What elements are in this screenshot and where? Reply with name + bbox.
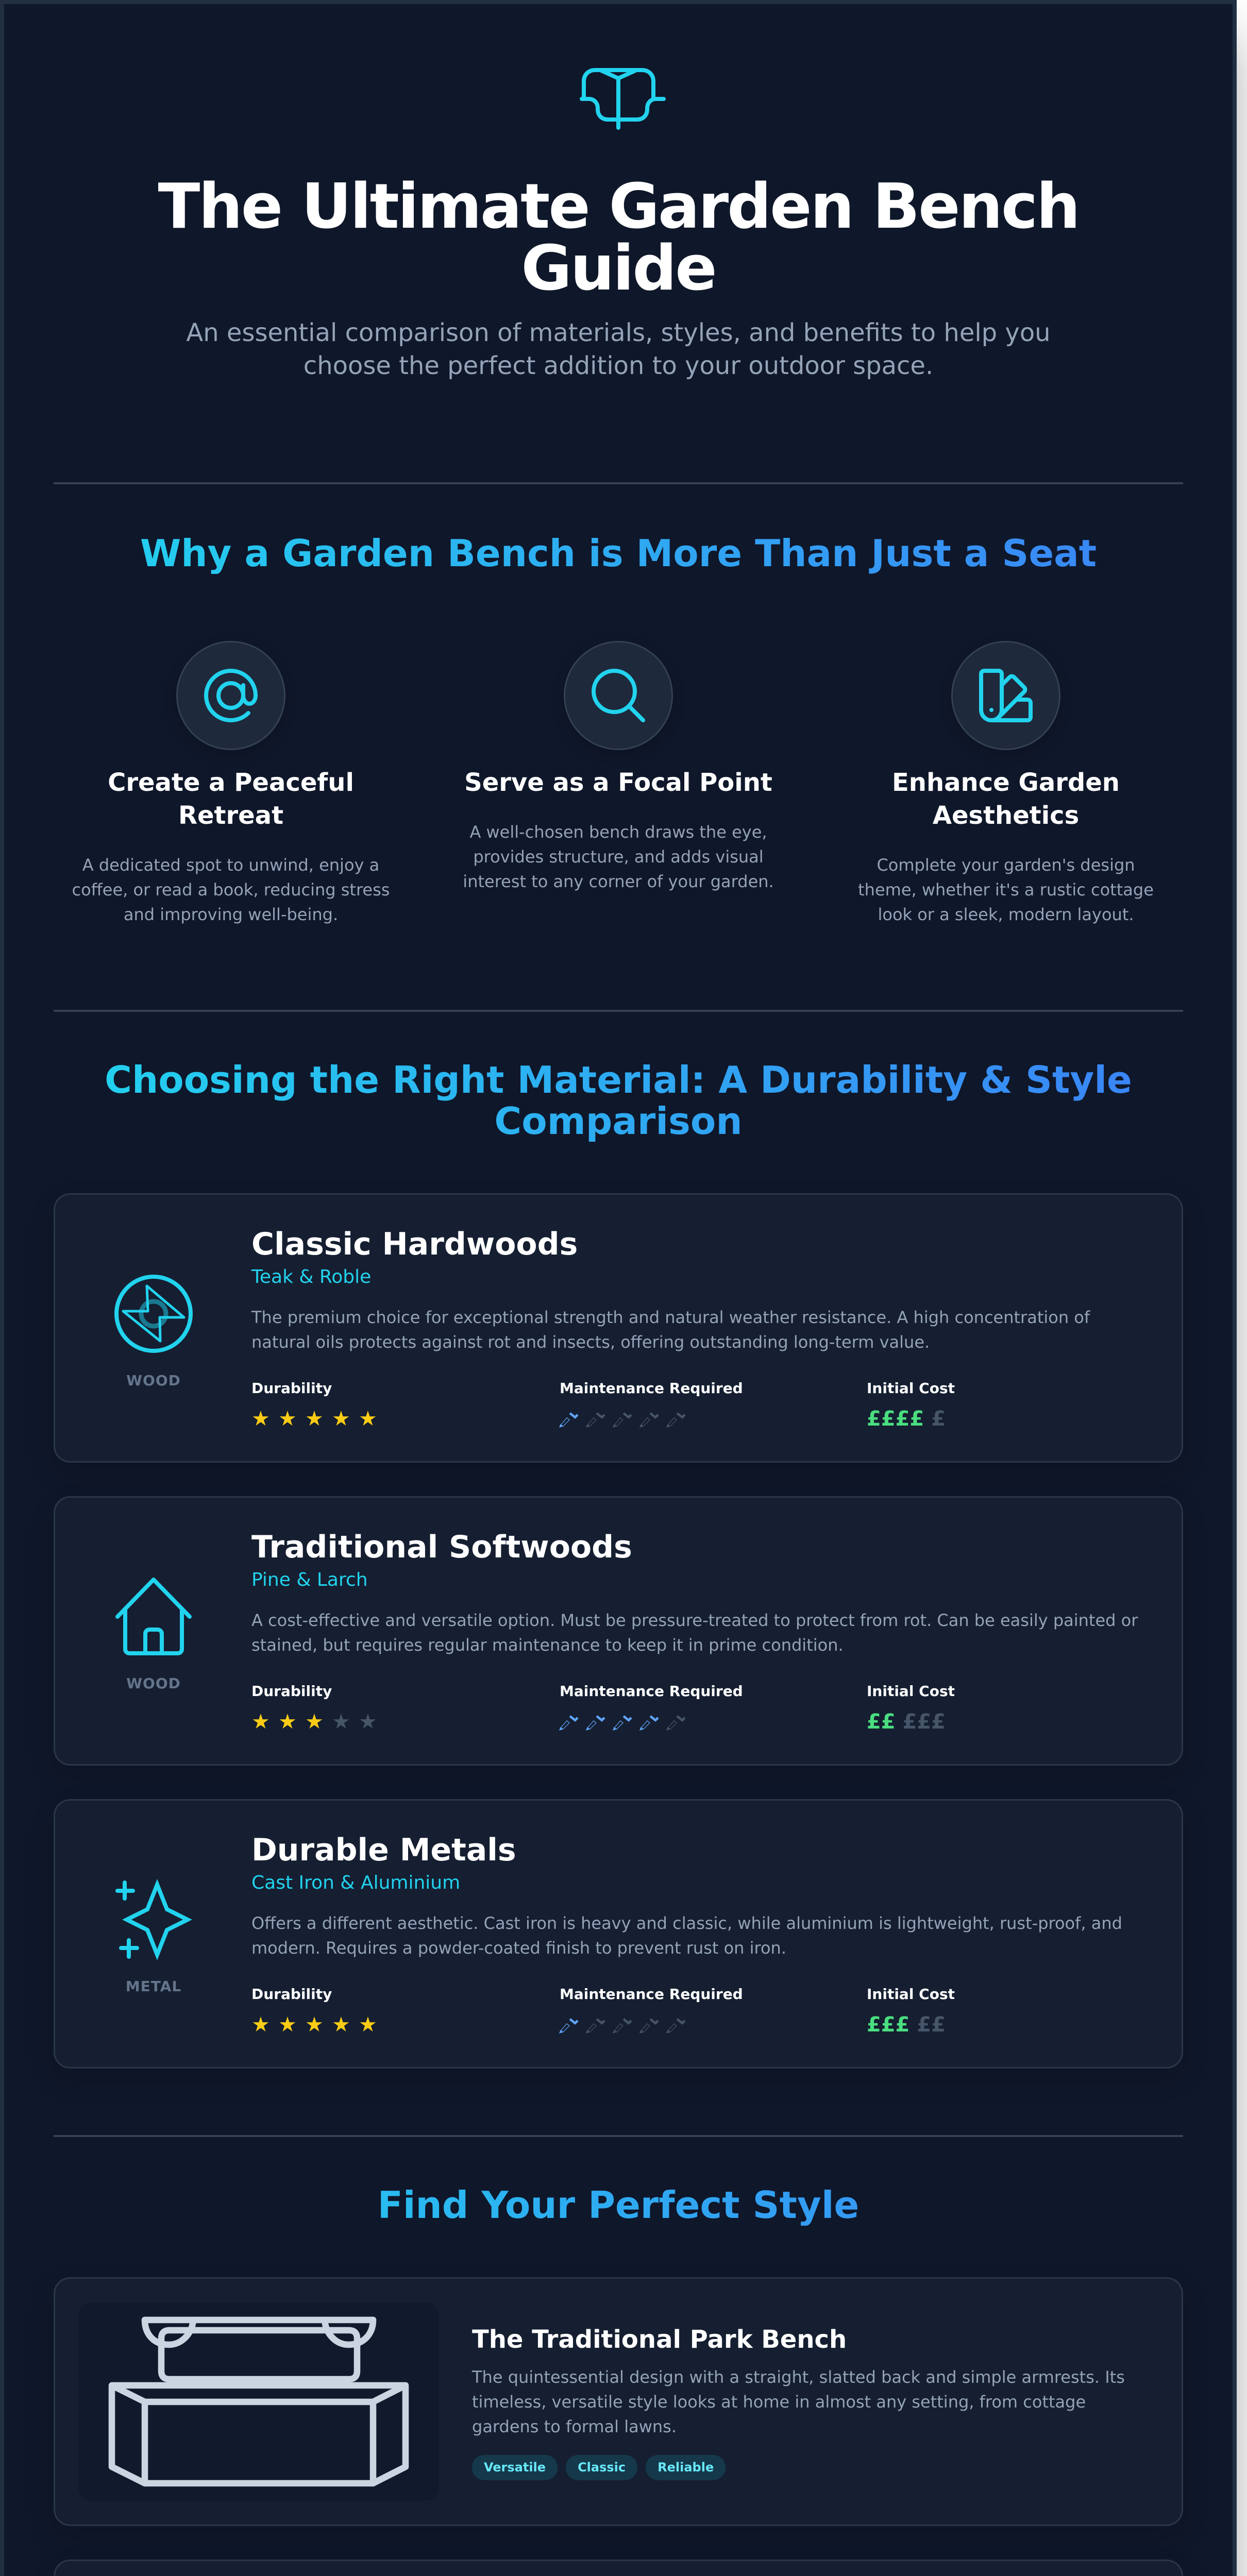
description: natural oils protects against rot and insects, offering outstanding long-term value.: [251, 1332, 930, 1352]
rating: durability stars: ★: [278, 1407, 297, 1431]
icon circle: magnifier: [564, 641, 673, 750]
description: Offers a different aesthetic. Cast iron is heavy and classic, while aluminium is lightweight, rust-proof, and: [251, 1913, 1122, 1933]
label: cost: Initial Cost: [867, 1683, 955, 1700]
label: wood: WOOD: [126, 1675, 181, 1692]
text: peaceful retreat: and improving well-being.: [124, 905, 338, 924]
description: [472, 2365, 1125, 2439]
description: modern. Requires a powder-coated finish to prevent rust on iron.: [251, 1938, 786, 1958]
icon: house: [115, 1578, 192, 1655]
label: cost: Initial Cost: [867, 1380, 955, 1397]
rating: durability stars: ★: [278, 1710, 297, 1734]
heading: aesthetics: [892, 768, 1120, 830]
rating: durability stars: ★: [305, 1710, 324, 1734]
species: Cast Iron & Aluminium: [251, 1872, 460, 1893]
text: focal point: A well-chosen bench draws the eye,: [469, 822, 767, 842]
tags: Reliable: [658, 2460, 714, 2475]
icon: sparkles: [115, 1879, 192, 1960]
subtitle: An essential comparison of materials, styles, and benefits to help you: [186, 318, 1051, 347]
text: peaceful retreat: [72, 855, 390, 924]
description: The premium choice for exceptional strength and natural weather resistance. A high concentration of: [251, 1308, 1090, 1327]
icon: wood bolt: [114, 1275, 193, 1353]
icon circle: swatch: [951, 641, 1060, 750]
label: maintenance: Maintenance Required: [560, 1986, 743, 2003]
rating: durability stars: ★: [251, 1407, 270, 1431]
heading: materials: Choosing the Right Material: A Durability & Style: [105, 1058, 1132, 1101]
description: gardens to formal lawns.: [472, 2417, 677, 2436]
panel: durable metals: [54, 1799, 1183, 2069]
heading: aesthetics: Aesthetics: [933, 801, 1079, 830]
label: maintenance: Maintenance Required: [560, 1683, 743, 1700]
rating: maintenance: [559, 2018, 685, 2033]
rating: cost: ££ £££: [867, 1710, 946, 1734]
rating: cost: £££ ££: [867, 2013, 946, 2037]
label: durability: Durability: [251, 1380, 332, 1397]
rating: durability stars: ★: [359, 1710, 377, 1734]
icon: open book: [580, 68, 666, 130]
name: The Traditional Park Bench: [472, 2325, 847, 2354]
heading: peaceful retreat: Create a Peaceful: [108, 768, 354, 797]
heading: materials: Comparison: [494, 1099, 743, 1143]
panel: classic hardwoods: [54, 1193, 1183, 1463]
rating: durability stars: [251, 1407, 377, 1431]
species: Pine & Larch: [251, 1569, 368, 1590]
species: Teak & Roble: [251, 1266, 371, 1287]
heading: styles: Find Your Perfect Style: [378, 2183, 859, 2227]
heading: why a bench: Why a Garden Bench is More Than Just a Seat: [140, 532, 1097, 575]
tags: Versatile: [484, 2460, 546, 2475]
rating: durability stars: [251, 2013, 377, 2037]
rating: durability stars: ★: [278, 2013, 297, 2037]
heading: peaceful retreat: [108, 768, 354, 830]
heading: styles: [54, 2184, 1183, 2226]
text: aesthetics: theme, whether it's a rustic cottage: [858, 880, 1154, 900]
description: timeless, versatile style looks at home in almost any setting, from cottage: [472, 2392, 1086, 2412]
tags: [472, 2455, 726, 2480]
subtitle: choose the perfect addition to your outdoor space.: [304, 351, 933, 380]
title: The Ultimate Garden Bench: [158, 171, 1079, 243]
label: cost: Initial Cost: [867, 1986, 955, 2003]
panel: traditional park bench: [54, 2277, 1183, 2526]
name: Traditional Softwoods: [251, 1529, 632, 1565]
heading: focal point: Serve as a Focal Point: [464, 768, 772, 797]
name: Classic Hardwoods: [251, 1226, 578, 1262]
description: [251, 1308, 1090, 1352]
label: durability: Durability: [251, 1683, 332, 1700]
label: metal: METAL: [126, 1978, 181, 1995]
label: maintenance: Maintenance Required: [560, 1380, 743, 1397]
rating: durability stars: ★: [305, 1407, 324, 1431]
panel: traditional softwoods: [54, 1496, 1183, 1766]
rating: durability stars: [251, 1710, 377, 1734]
icon circle: at symbol: [176, 641, 285, 750]
tags: Classic: [578, 2460, 626, 2475]
rating: durability stars: ★: [359, 2013, 377, 2037]
text: aesthetics: look or a sleek, modern layout.: [878, 905, 1134, 924]
description: [251, 1611, 1138, 1655]
subtitle: [186, 318, 1051, 380]
rating: durability stars: ★: [305, 2013, 324, 2037]
text: focal point: [463, 822, 774, 891]
label: wood: WOOD: [126, 1372, 181, 1389]
rating: maintenance: [559, 1412, 685, 1428]
text: peaceful retreat: coffee, or read a book, reducing stress: [72, 880, 390, 900]
rating: durability stars: ★: [251, 1710, 270, 1734]
text: focal point: provides structure, and adds visual: [473, 847, 764, 867]
rating: durability stars: ★: [332, 1710, 350, 1734]
heading: materials: [54, 1059, 1183, 1142]
panel: lutyens benches: [54, 2560, 1183, 2576]
text: focal point: interest to any corner of your garden.: [463, 872, 774, 891]
name: Durable Metals: [251, 1832, 516, 1868]
description: The quintessential design with a straight, slatted back and simple armrests. Its: [472, 2367, 1125, 2387]
text: aesthetics: Complete your garden's design: [877, 855, 1135, 875]
rating: durability stars: ★: [332, 2013, 350, 2037]
label: durability: Durability: [251, 1986, 332, 2003]
rating: durability stars: ★: [251, 2013, 270, 2037]
illustration: park bench: [78, 2303, 439, 2501]
rating: durability stars: ★: [332, 1407, 350, 1431]
rating: durability stars: ★: [359, 1407, 377, 1431]
rating: cost: ££££ £: [867, 1407, 946, 1431]
text: aesthetics: [858, 855, 1154, 924]
title: Guide: [521, 233, 716, 304]
description: [251, 1913, 1122, 1958]
description: A cost-effective and versatile option. Must be pressure-treated to protect from rot. Can be easily painted or: [251, 1611, 1138, 1630]
heading: peaceful retreat: Retreat: [178, 801, 283, 830]
title: [158, 171, 1079, 304]
description: stained, but requires regular maintenance to keep it in prime condition.: [251, 1635, 844, 1655]
text: peaceful retreat: A dedicated spot to unwind, enjoy a: [82, 855, 379, 875]
heading: aesthetics: Enhance Garden: [892, 768, 1120, 797]
rating: maintenance: [559, 1715, 685, 1731]
